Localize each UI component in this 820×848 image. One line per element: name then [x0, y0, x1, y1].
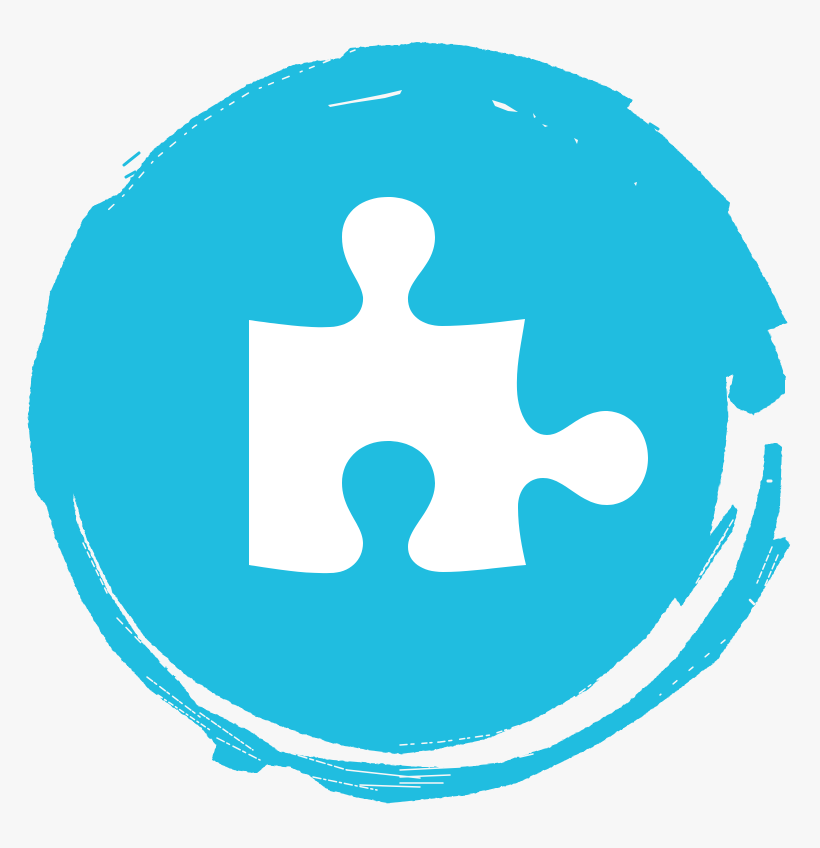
brush texture ticks: [83, 50, 778, 790]
detached brush slivers: [124, 124, 658, 177]
white highlight streaks: [328, 90, 637, 186]
puzzle piece: [249, 197, 648, 573]
